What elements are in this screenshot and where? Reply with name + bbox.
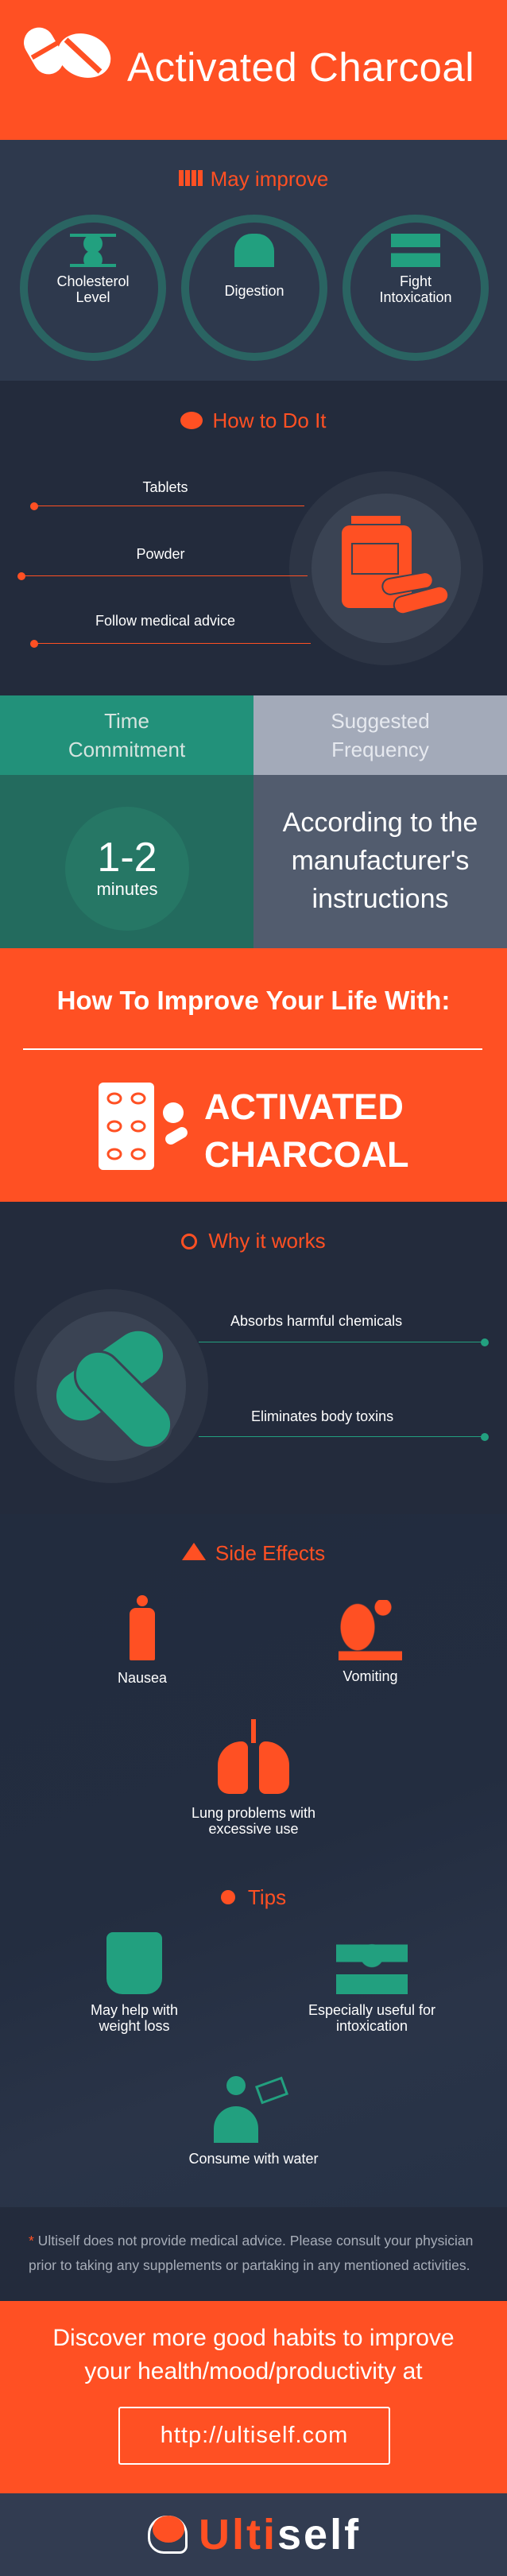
text [52, 2325, 455, 2384]
item: fight intoxication [343, 215, 489, 361]
item: eliminates: Eliminates body toxins [251, 1408, 393, 1424]
title: CHARCOAL [204, 1134, 408, 1175]
text: Discover more good habits to improve [52, 2325, 455, 2351]
panel: how to improve banner [0, 948, 507, 1202]
heading: How to Do It [212, 409, 327, 432]
panel: suggested frequency [254, 695, 507, 948]
value: According to the manufacturer's instructions [283, 808, 478, 914]
panel: how to do it [0, 381, 507, 695]
item: follow medical advice [30, 613, 311, 648]
item: vomiting [339, 1600, 402, 1684]
heading: tips [221, 1885, 286, 1909]
panel: time commitment [0, 695, 254, 948]
item: follow medical advice: Follow medical advice [95, 613, 235, 629]
panel: side effects and tips [0, 1514, 507, 2207]
value [65, 807, 189, 931]
item: lung problems: Lung problems with [192, 1805, 315, 1821]
item: consume with water [188, 2076, 319, 2167]
item: digestion: Digestion [224, 283, 284, 299]
illustration: capsules [14, 1289, 208, 1483]
footer cta [0, 2301, 507, 2493]
title [204, 1087, 408, 1175]
item: tablets [30, 479, 304, 510]
item: weight loss: weight loss [99, 2018, 170, 2034]
text: your health/mood/productivity at [84, 2358, 423, 2384]
item: eliminates [199, 1408, 489, 1441]
title: Activated Charcoal [127, 45, 474, 90]
item: weight loss [91, 1932, 178, 2034]
item: powder [17, 546, 308, 580]
header: Commitment [68, 738, 185, 761]
item: lung problems [192, 1719, 315, 1837]
item: cholesterol: Level [75, 289, 110, 305]
item: powder: Powder [136, 546, 185, 562]
item: tablets: Tablets [142, 479, 188, 495]
item: absorbs [199, 1313, 489, 1346]
button: url [118, 2407, 390, 2465]
disclaimer [29, 2233, 473, 2273]
heading: How To Improve Your Life With: [57, 986, 450, 1015]
header: Suggested [331, 709, 430, 733]
header [0, 0, 507, 140]
button: url: http://ultiself.com [161, 2423, 348, 2448]
item: intoxication [308, 1944, 435, 2034]
item: fight intoxication: Fight [400, 273, 432, 289]
item: nausea: Nausea [118, 1670, 167, 1686]
icon: pill pack [99, 1083, 188, 1170]
header [0, 695, 254, 775]
item: fight intoxication: Intoxication [379, 289, 452, 305]
panel: side effects and tips: excessive use [208, 1821, 299, 1837]
footer logo bar [0, 2493, 507, 2576]
item: digestion [181, 215, 327, 361]
logo: Ultiself [199, 2511, 361, 2559]
value: minutes [96, 879, 158, 899]
icon: pills [24, 27, 111, 78]
header [254, 695, 507, 775]
item: vomiting: Vomiting [343, 1668, 398, 1684]
header: Frequency [331, 738, 429, 761]
heading: tips: Tips [248, 1885, 286, 1909]
value: 1-2 [97, 835, 157, 881]
item: intoxication: intoxication [336, 2018, 408, 2034]
heading: side effects: Side Effects [215, 1541, 325, 1565]
header: Time [104, 709, 149, 733]
title: ACTIVATED [204, 1087, 404, 1127]
heading: May improve [211, 167, 328, 191]
item: absorbs: Absorbs harmful chemicals [230, 1313, 402, 1329]
disclaimer: prior to taking any supplements or partaking in any mentioned activities. [29, 2257, 470, 2273]
disclaimer: * Ultiself does not provide medical advice. Please consult your physician [29, 2233, 473, 2249]
item: weight loss: May help with [91, 2002, 178, 2018]
item: cholesterol: Cholesterol [56, 273, 130, 289]
item: intoxication: Especially useful for [308, 2002, 435, 2018]
item: nausea [118, 1595, 167, 1686]
item: cholesterol [20, 215, 166, 361]
panel: may improve [0, 140, 507, 381]
illustration: bottle circle [289, 471, 483, 665]
panel: why it works [0, 1202, 507, 1514]
item: consume with water: Consume with water [188, 2151, 319, 2167]
heading: Why it works [208, 1229, 326, 1253]
